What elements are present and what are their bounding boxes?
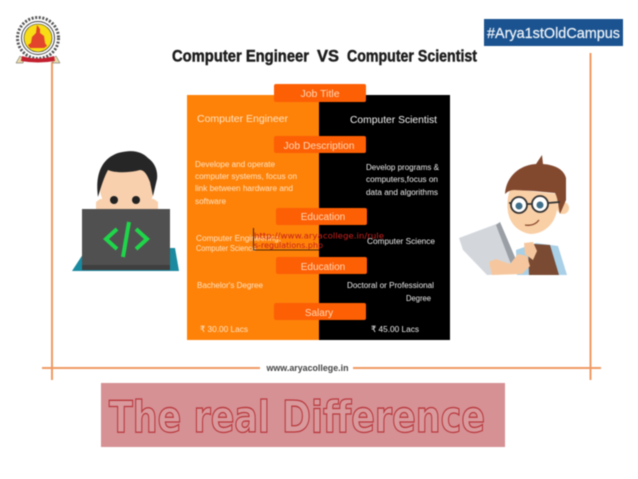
icon: college logo	[16, 18, 60, 63]
panel: computer engineer column	[187, 95, 319, 340]
frame lines	[42, 53, 601, 380]
scientist salary: ₹ 45.00 Lacs	[371, 324, 419, 334]
hyperlink overlay: http://www.aryacollege.in/rule	[254, 232, 384, 240]
engineer salary: ₹ 30.00 Lacs	[200, 324, 248, 334]
title: Computer Engineer	[172, 48, 310, 66]
engineer description	[195, 160, 297, 206]
engineer education: Computer Science	[196, 244, 256, 253]
tab: education level: Education	[301, 262, 345, 273]
scientist description	[366, 163, 440, 197]
engineer description: computer systems, focus on	[195, 172, 297, 181]
tab: job description: Job Description	[284, 140, 355, 152]
tab: job title: Job Title	[300, 88, 340, 100]
panel: computer scientist column	[319, 95, 450, 340]
banner: the real difference: The real Difference	[109, 392, 485, 443]
scientist description: Develop programs &	[366, 163, 440, 172]
tab: job description	[274, 136, 366, 153]
engineer description: Develope and operate	[195, 160, 276, 169]
tab: education level	[276, 257, 367, 274]
tab: salary: Salary	[305, 308, 333, 319]
scientist description: data and algorithms	[366, 188, 438, 197]
engineer job title: Computer Engineer	[197, 113, 288, 125]
engineer description: software	[195, 197, 227, 206]
engineer education	[196, 234, 281, 253]
comparison panel	[187, 84, 450, 340]
title: VS	[317, 48, 339, 66]
tab: salary	[274, 303, 366, 320]
title: Computer Scientist	[347, 48, 477, 66]
scientist degree: Degree	[406, 294, 432, 303]
tab: education: Education	[301, 212, 345, 223]
website url: www.aryacollege.in	[266, 363, 349, 374]
hashtag badge	[484, 19, 623, 46]
title	[172, 48, 477, 66]
tab: education	[276, 208, 367, 225]
engineer degree: Bachelor's Degree	[197, 281, 264, 290]
tab: job title	[274, 84, 366, 102]
banner: the real difference	[101, 383, 505, 447]
hashtag badge: #Arya1stOldCampus	[487, 25, 620, 42]
hyperlink overlay	[254, 228, 384, 250]
illustration: computer scientist with tablet	[459, 155, 569, 275]
scientist description: computers,focus on	[366, 175, 438, 184]
illustration: computer engineer at laptop	[72, 151, 179, 271]
engineer description: link between hardware and	[195, 184, 293, 193]
scientist degree	[347, 281, 434, 303]
engineer education: Computer Engineering,	[196, 234, 281, 243]
scientist degree: Doctoral or Professional	[347, 281, 434, 290]
scientist education: Computer Science	[367, 236, 435, 246]
scientist job title: Computer Scientist	[350, 115, 437, 126]
hyperlink overlay: s-regulations.php	[254, 241, 323, 250]
